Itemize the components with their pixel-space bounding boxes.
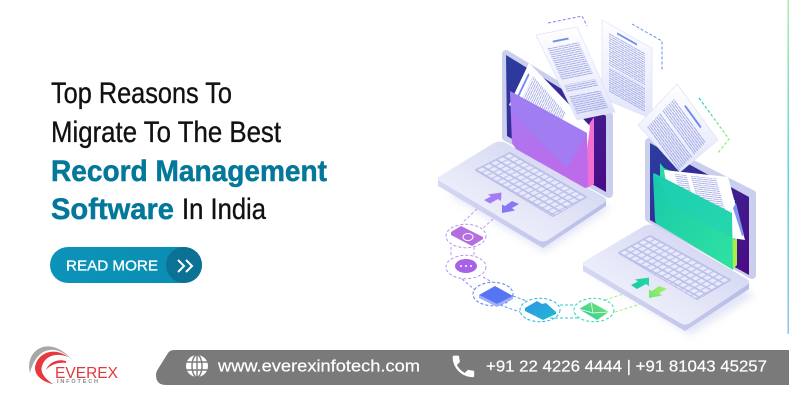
icon: folder [520,298,560,322]
logo: INFOTECH [57,379,98,385]
logo [29,346,118,385]
heading: Record Management [51,155,327,188]
icon: down arrow [649,286,667,298]
dashed connector chain [451,209,640,318]
dashed brackets [548,16,729,153]
left laptop [437,54,610,252]
icon: document [473,282,513,307]
right edge line [788,0,789,334]
footer contact bar [156,350,789,385]
logo: EVEREX [55,365,118,382]
icon: up arrow [484,192,502,204]
right folder with paper [653,163,745,270]
floating document 1 [536,27,615,120]
heading: In India [182,193,266,226]
phone numbers: +91 22 4226 4444 | +91 81043 45257 [486,358,767,376]
icon: chat bubble [446,255,486,279]
heading: Migrate To The Best [51,116,282,149]
left folder with paper [509,63,594,188]
icon: globe [186,355,208,377]
icon: down arrow [502,201,519,213]
heading: Top Reasons To [51,77,232,110]
heading: Software [51,193,174,226]
read more button [50,247,202,283]
floating document 3 [638,84,718,172]
floating document 2 [602,20,652,119]
icon: mail [574,298,614,322]
right laptop [582,142,755,335]
icon: phone [453,356,474,377]
heading [51,77,327,226]
icon: camera [446,224,486,248]
read more button: READ MORE [66,258,158,274]
icon: up arrow [631,278,649,289]
website: www.everexinfotech.com [217,358,420,376]
